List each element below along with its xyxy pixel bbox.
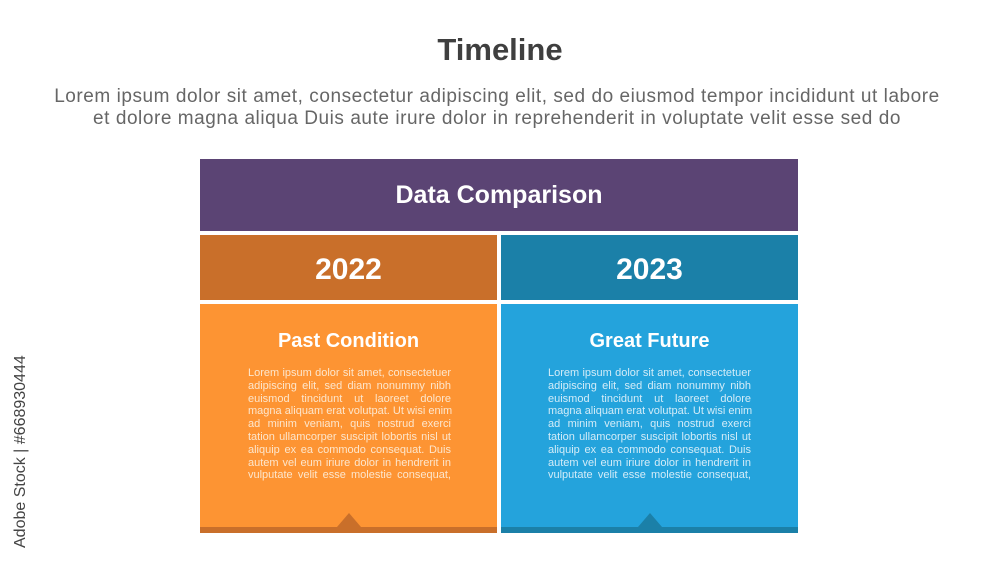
text block: Lorem ipsum dolor sit amet, consectetuer: [548, 367, 751, 379]
heading: Past Condition: Past Condition: [278, 330, 419, 352]
text block: autem vel eum iriure dolor in hendrerit in: [248, 457, 451, 469]
year 2023: 2023: [616, 253, 683, 286]
text block: ad minim veniam, quis nostrud exerci: [248, 418, 451, 430]
year 2023: [501, 235, 798, 300]
header: Data Comparison: Data Comparison: [396, 181, 602, 209]
marker triangle: [638, 513, 662, 527]
text block: autem vel eum iriure dolor in hendrerit in: [548, 457, 751, 469]
subtitle text: Lorem ipsum dolor sit amet, consectetur adipiscing elit, sed do eiusmod tempor incididunt ut labore: [54, 86, 940, 107]
text block: tation ullamcorper suscipit lobortis nisl ut: [248, 431, 451, 443]
subtitle text: [54, 86, 940, 129]
text block: vulputate velit esse molestie consequat,: [248, 469, 451, 481]
text block: euismod tincidunt ut laoreet dolore: [548, 393, 751, 405]
text block: euismod tincidunt ut laoreet dolore: [248, 393, 451, 405]
text block: [548, 367, 752, 481]
text block: ad minim veniam, quis nostrud exerci: [548, 418, 751, 430]
text block: adipiscing elit, sed diam nonummy nibh: [248, 380, 451, 392]
text block: magna aliquam erat volutpat. Ut wisi enim: [548, 405, 752, 417]
subtitle text: et dolore magna aliqua Duis aute irure dolor in reprehenderit in voluptate velit esse sed do: [93, 108, 901, 129]
panel: great future: [501, 304, 798, 533]
heading: Great Future: Great Future: [589, 330, 710, 352]
watermark id: Adobe Stock | #668930444: [12, 355, 29, 548]
text block: Lorem ipsum dolor sit amet, consectetuer: [248, 367, 451, 379]
text block: [248, 367, 452, 481]
year 2022: 2022: [315, 253, 382, 286]
text block: adipiscing elit, sed diam nonummy nibh: [548, 380, 751, 392]
text block: vulputate velit esse molestie consequat,: [548, 469, 751, 481]
year 2022: [200, 235, 497, 300]
header: Data Comparison: [200, 159, 798, 231]
text block: aliquip ex ea commodo consequat. Duis: [548, 444, 751, 456]
text block: aliquip ex ea commodo consequat. Duis: [248, 444, 451, 456]
marker triangle: [337, 513, 361, 527]
text block: magna aliquam erat volutpat. Ut wisi enim: [248, 405, 452, 417]
title: Timeline: [437, 32, 563, 67]
panel: past condition: [200, 304, 497, 533]
text block: tation ullamcorper suscipit lobortis nisl ut: [548, 431, 751, 443]
